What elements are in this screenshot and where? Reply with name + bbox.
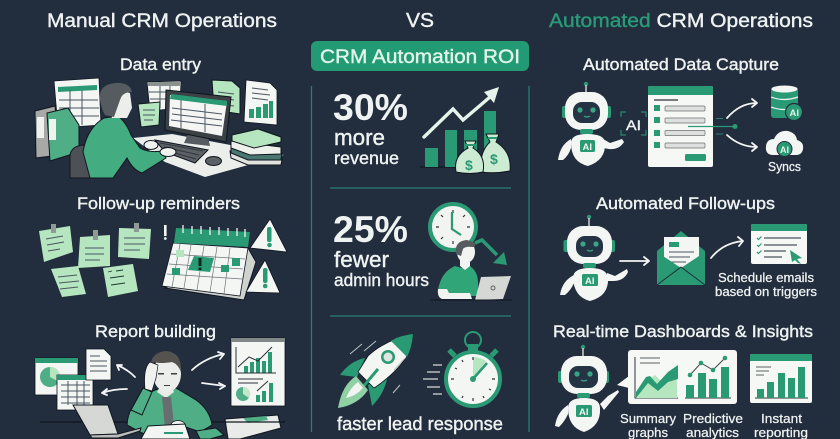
caption: schedule emails based on triggers	[715, 271, 817, 299]
caption: summary graphs	[620, 412, 677, 439]
caption: predictive analytics: Predictive	[683, 412, 743, 426]
heading: automated: Automated CRM Operations	[549, 10, 813, 32]
caption: schedule emails based on triggers: based on triggers	[715, 285, 817, 299]
caption: predictive analytics	[683, 412, 743, 439]
icon: robot 1	[558, 82, 624, 166]
heading: manual: Manual CRM Operations	[47, 10, 277, 32]
caption: faster lead response: faster lead response	[337, 414, 503, 434]
arrow: to cloud	[727, 135, 757, 151]
badge: CRM Automation ROI: CRM Automation ROI	[320, 47, 520, 68]
subheading: real-time dashboards: Real-time Dashboards & Insights	[553, 322, 813, 341]
caption: schedule emails based on triggers: Schedule emails	[718, 271, 814, 285]
subheading: follow-up reminders: Follow-up reminders	[77, 194, 240, 213]
icon: AI cloud syncs: AI	[780, 145, 789, 155]
panel: manual CRM operations	[35, 10, 287, 439]
chart: rising bars with arrow and money bags: $	[465, 157, 473, 173]
icon: AI frame	[621, 112, 646, 135]
icon: AI database	[771, 86, 802, 120]
icon: AI frame: AI	[626, 117, 641, 133]
arrow: to database	[727, 99, 757, 118]
icon: robot 2: AI	[585, 276, 594, 287]
icon: robot 3	[555, 345, 619, 432]
icon: schedule window with checklist	[751, 224, 807, 264]
chart: rising bars with arrow and money bags: $	[490, 151, 498, 167]
stat: 30% more revenue	[333, 87, 408, 168]
stat: 25% fewer admin hours: 25%	[333, 209, 408, 250]
subheading: report building: Report building	[95, 322, 216, 341]
subheading: data entry: Data entry	[120, 55, 202, 74]
panel: summary and predictive charts	[617, 350, 737, 404]
stat: 25% fewer admin hours	[333, 209, 429, 290]
panel: automated CRM operations	[549, 10, 817, 439]
icon: robot 1: AI	[582, 142, 592, 153]
icon: AI database: AI	[790, 108, 799, 119]
stat: 30% more revenue: 30%	[333, 87, 408, 128]
caption: summary graphs: Summary	[620, 412, 677, 426]
heading: VS: VS	[406, 10, 434, 32]
stat: 30% more revenue: revenue	[334, 148, 399, 168]
illustration: sticky notes	[39, 223, 151, 297]
icon: form window with capture fields	[648, 86, 738, 167]
icon: AI cloud syncs: Syncs	[768, 160, 801, 174]
caption: instant reporting: Instant	[761, 412, 803, 426]
icon: stopwatch	[423, 332, 500, 406]
caption: instant reporting	[754, 412, 808, 439]
arrow: robot to email	[620, 257, 649, 265]
panel: CRM automation ROI	[311, 10, 529, 434]
icon: rocket	[338, 334, 413, 408]
subheading: automated follow-ups: Automated Follow-ups	[596, 194, 775, 213]
stat: 25% fewer admin hours: fewer	[334, 247, 389, 272]
icon: AI cloud syncs	[766, 131, 803, 174]
subheading: automated data capture: Automated Data Capture	[583, 55, 779, 74]
panel: instant reporting window	[750, 354, 812, 403]
stat: 25% fewer admin hours: admin hours	[334, 270, 429, 290]
icon: clock with person at laptop	[430, 204, 512, 300]
stat: 30% more revenue: more	[334, 125, 385, 150]
badge: CRM Automation ROI	[311, 41, 529, 71]
illustration: person doing data entry	[35, 78, 284, 178]
chart: rising bars with arrow and money bags	[420, 87, 510, 174]
arrow: email to schedule	[711, 237, 743, 258]
illustration: stressed person building reports	[35, 338, 285, 439]
illustration: calendar with warnings	[162, 219, 287, 300]
icon: robot 2	[560, 215, 628, 301]
icon: envelope	[657, 231, 705, 285]
icon: robot 3: AI	[579, 407, 588, 418]
